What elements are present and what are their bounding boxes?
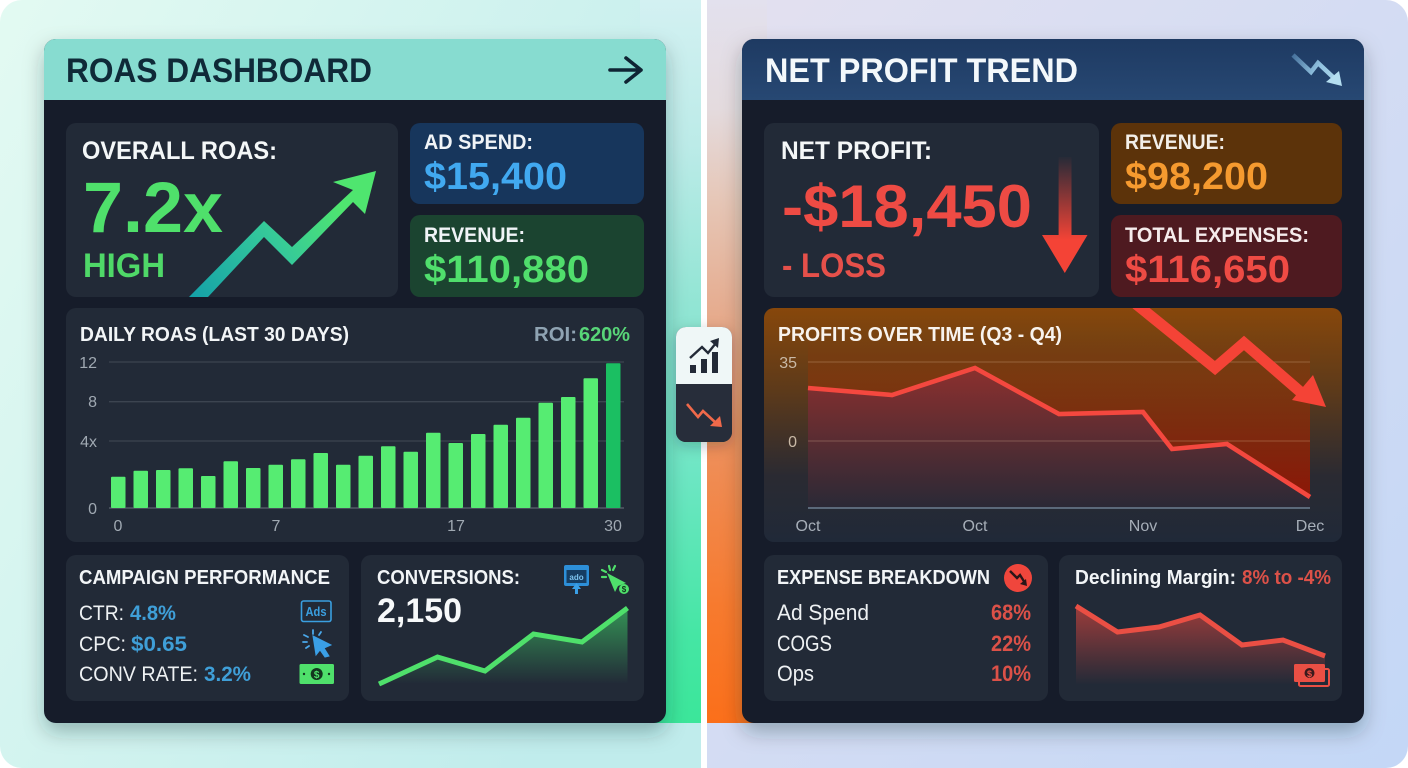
card: ad spend: AD SPEND: <box>424 131 533 154</box>
card: declining margin: 8% to -4% <box>1242 567 1331 589</box>
x axis labels: Oct <box>963 518 988 535</box>
y axis labels: 4x <box>80 434 97 451</box>
card: net profit: NET PROFIT: <box>781 137 932 165</box>
heading: net profit trend: NET PROFIT TREND <box>765 52 1078 90</box>
card: revenue: REVENUE: <box>424 224 525 247</box>
toggle: upward state <box>676 327 732 384</box>
x axis labels: 17 <box>447 518 465 535</box>
card: net profit: - LOSS <box>782 247 886 285</box>
card: conversions: 2,150 <box>377 592 462 630</box>
card: total expenses: TOTAL EXPENSES: <box>1125 224 1309 247</box>
card: revenue: REVENUE: <box>1125 131 1225 154</box>
card: campaign performance: CONV RATE: <box>79 663 198 686</box>
card: declining margin <box>1059 555 1342 701</box>
card: revenue <box>1111 123 1342 204</box>
y axis labels <box>779 355 797 451</box>
big falling arrow <box>1136 304 1326 407</box>
card: overall ROAS: HIGH <box>83 247 165 285</box>
card: overall ROAS: OVERALL ROAS: <box>82 137 277 165</box>
panel: net profit trend <box>742 39 1364 723</box>
card: expense breakdown: COGS <box>777 631 832 656</box>
toggle: downward state <box>676 384 732 442</box>
header bar: net profit <box>742 39 1364 100</box>
line chart: conversions <box>379 608 628 685</box>
card: total expenses <box>1111 215 1342 297</box>
y axis labels: 0 <box>788 434 797 451</box>
x axis labels: Nov <box>1129 518 1157 535</box>
card: expense breakdown: 68% <box>991 600 1031 625</box>
center toggle widget <box>676 327 732 442</box>
card: daily ROAS chart <box>66 308 644 542</box>
icon: rising bars <box>690 338 719 373</box>
card: conversions <box>361 555 644 701</box>
card: campaign performance: CPC: <box>79 633 126 656</box>
y axis labels: 35 <box>779 355 797 372</box>
panel: ROAS dashboard <box>44 39 666 723</box>
x axis labels: 7 <box>272 518 281 535</box>
card: campaign performance: 3.2% <box>204 663 251 686</box>
card: overall ROAS: 7.2x <box>83 169 223 248</box>
heading: ROAS dashboard: ROAS DASHBOARD <box>66 52 372 90</box>
bar chart: daily ROAS <box>111 363 620 508</box>
card: expense breakdown: 10% <box>991 661 1031 686</box>
card: profits over time chart: PROFITS OVER TIME (Q3 - Q4) <box>778 324 1062 346</box>
card: campaign performance <box>66 555 349 701</box>
icon: red trend badge <box>1004 564 1032 592</box>
icon: ads badge: Ads <box>306 604 326 619</box>
icon: down arrow <box>1042 157 1088 273</box>
card: daily ROAS chart: DAILY ROAS (LAST 30 DAYS) <box>80 324 349 346</box>
card: net profit: -$18,450 <box>782 173 1032 240</box>
card: campaign performance: CTR: <box>79 602 124 625</box>
card: campaign performance: 4.8% <box>130 602 176 625</box>
icon: falling arrow <box>687 404 722 427</box>
x axis labels: Oct <box>796 518 821 535</box>
card: daily ROAS chart: 620% <box>579 324 630 346</box>
card: expense breakdown <box>764 555 1048 701</box>
card: net profit <box>764 123 1099 297</box>
card: revenue: $98,200 <box>1125 156 1268 198</box>
card: revenue: $110,880 <box>424 249 589 291</box>
icon: green click <box>602 566 629 594</box>
card: overall ROAS <box>66 123 398 297</box>
icon: falling trend arrow <box>1293 55 1342 86</box>
x axis labels: Dec <box>1296 518 1324 535</box>
card: declining margin: Declining Margin: <box>1075 567 1236 589</box>
icon: rising arrow <box>189 171 376 297</box>
y axis labels: 8 <box>88 394 97 411</box>
icon: cursor click <box>303 630 331 657</box>
line chart: margin <box>1076 606 1325 685</box>
icon: ads badge <box>302 601 331 622</box>
icon: red cash stack <box>1294 664 1329 686</box>
icon: ad screen <box>564 565 589 594</box>
card: ad spend: $15,400 <box>424 156 567 198</box>
icon: banknote: $ <box>314 670 320 681</box>
card: campaign performance: CAMPAIGN PERFORMANCE <box>79 567 330 589</box>
y axis labels <box>79 355 97 518</box>
card: profits over time chart <box>764 304 1342 542</box>
card: expense breakdown: EXPENSE BREAKDOWN <box>777 567 990 589</box>
icon: banknote <box>300 664 334 684</box>
area chart: profits <box>808 362 1310 508</box>
card: ad spend <box>410 123 644 204</box>
icon: red cash stack: $ <box>1307 669 1312 679</box>
card: revenue <box>410 215 644 297</box>
icon: right arrow <box>610 58 641 82</box>
card: expense breakdown: Ad Spend <box>777 600 869 625</box>
card: expense breakdown: 22% <box>991 631 1031 656</box>
x axis labels: 0 <box>114 518 123 535</box>
card: conversions: CONVERSIONS: <box>377 567 520 589</box>
y axis labels: 0 <box>88 501 97 518</box>
header bar: ROAS dashboard <box>44 39 666 100</box>
x axis labels <box>796 518 1324 535</box>
x axis labels: 30 <box>604 518 622 535</box>
card: total expenses: $116,650 <box>1125 249 1290 291</box>
y axis labels: 12 <box>79 355 97 372</box>
x axis labels <box>114 518 622 535</box>
icon: ad screen: ado <box>569 573 584 582</box>
icon: green click: $ <box>622 585 627 594</box>
card: campaign performance: $0.65 <box>131 633 187 656</box>
card: daily ROAS chart: ROI: <box>534 324 577 346</box>
card: expense breakdown: Ops <box>777 661 814 686</box>
